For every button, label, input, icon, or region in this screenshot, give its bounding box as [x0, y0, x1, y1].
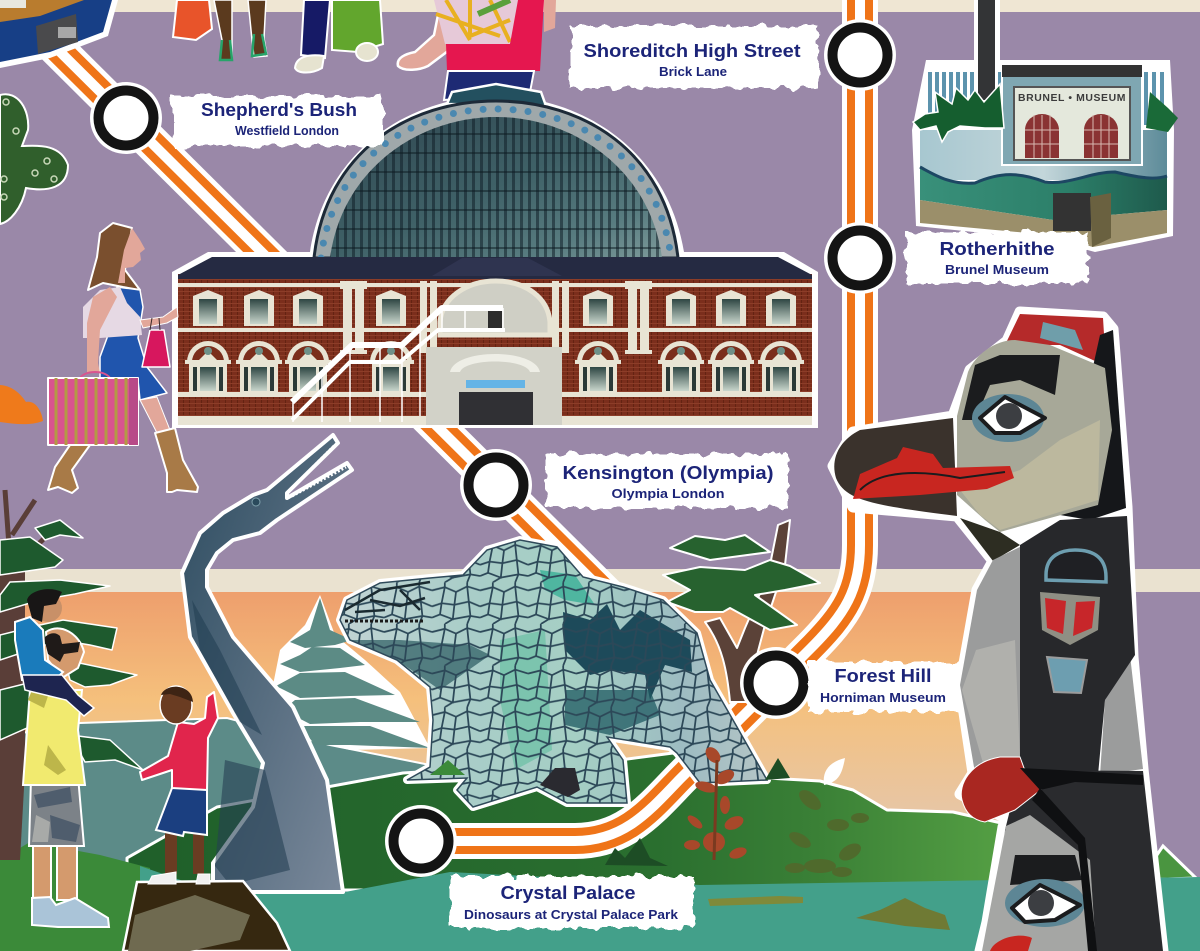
lower black diagonal [1032, 788, 1097, 951]
head side black [1060, 330, 1126, 520]
legs [33, 842, 77, 900]
label: Crystal Palace: Crystal Palace [500, 883, 636, 903]
label: Rotherhithe [906, 232, 1088, 284]
label: Rotherhithe: Brunel Museum [945, 263, 1049, 277]
white staircase [292, 308, 505, 422]
hair [88, 223, 140, 290]
man head [44, 628, 84, 678]
cornice and courses [178, 283, 812, 425]
face [118, 228, 145, 283]
foliage boughs [0, 520, 143, 770]
arm [398, 0, 462, 70]
bare branches [5, 490, 60, 560]
red shirt and arms [140, 692, 218, 790]
hat [1005, 314, 1106, 366]
dark door on upper landing [488, 311, 502, 328]
boughs [276, 598, 430, 748]
label: Kensington (Olympia) [546, 454, 788, 508]
blue trapezoid glyph [1047, 657, 1087, 693]
chimney [974, 0, 1000, 70]
grey right wing [1100, 655, 1143, 775]
illustration: rock [123, 881, 290, 951]
legs with sandals [214, 0, 267, 60]
teal shoulder patch [540, 570, 595, 605]
shorts [156, 788, 207, 836]
illustration: left pine tree [0, 490, 143, 860]
illustration: plesiosaur [182, 435, 352, 892]
illustration: mosaic dinosaur [340, 540, 767, 807]
pink top [446, 0, 544, 71]
patterned shirt [434, 0, 520, 44]
lower pole black [1000, 770, 1163, 951]
pale top [83, 287, 142, 338]
label: Shepherd's Bush: Shepherd's Bush [201, 100, 357, 120]
lower arched windows [185, 341, 804, 393]
label: Forest Hill: Horniman Museum [820, 691, 946, 705]
horizon cream band [0, 569, 1200, 592]
brick facade [178, 274, 812, 418]
illustration: pale pine tree [272, 595, 430, 750]
belly shadow [565, 690, 660, 735]
foliage [663, 535, 820, 630]
museum sign: BRUNEL • MUSEUM [1018, 92, 1126, 104]
label: Shoreditch High Street: Brick Lane [659, 65, 727, 79]
tube line: Shepherd's Bush to Kensington [30, 22, 610, 598]
upper windows [193, 290, 796, 326]
boy head [27, 589, 62, 622]
green bag [332, 0, 383, 52]
top cream band [0, 0, 1200, 12]
illustration: cactus [0, 94, 68, 224]
drum wall [920, 130, 1167, 180]
mosaic crack lines [340, 540, 767, 807]
illustration: shoppers legs and bags [173, 0, 383, 72]
blue oval glyph [1046, 550, 1106, 582]
dome glass [330, 117, 662, 258]
legs [165, 832, 204, 874]
trunk [0, 572, 25, 860]
landscape: hills and water [0, 718, 1200, 951]
railings [930, 72, 1162, 125]
station: Forest Hill [740, 647, 812, 719]
illustration: shopper woman [48, 223, 198, 493]
station: Rotherhithe [824, 222, 896, 294]
stone base [920, 200, 1167, 247]
illustration: orange flower [0, 385, 43, 424]
label: Forest Hill: Forest Hill [834, 666, 932, 686]
illustration: cedar tree [663, 520, 820, 702]
door [1053, 193, 1111, 247]
illustration: red-brown bush [684, 744, 748, 861]
magenta hand bag [142, 318, 170, 367]
tube line: Crystal Palace to Shoreditch [421, 0, 860, 841]
teal chest patch [500, 630, 552, 770]
grass tufts [430, 758, 790, 866]
illustration: olive bush [785, 786, 869, 877]
black band [1020, 768, 1143, 790]
label: Kensington (Olympia): Kensington (Olympia) [562, 463, 774, 483]
station: Crystal Palace [385, 805, 457, 877]
white backing [272, 595, 430, 750]
left meadow [0, 842, 150, 951]
head [957, 340, 1112, 532]
roof [178, 257, 812, 279]
camouflage shorts [29, 776, 84, 846]
dome outer rim [314, 101, 678, 258]
illustration: Olympia building [172, 84, 818, 428]
water reeds [856, 898, 950, 930]
head dark lines [345, 582, 430, 612]
illustration: boy in red [140, 686, 218, 884]
striped shopping bag [48, 372, 138, 445]
dark foot shadow [540, 768, 580, 797]
beak [834, 418, 957, 516]
label: Crystal Palace: Dinosaurs at Crystal Palace Park [464, 908, 678, 922]
dino body [340, 540, 767, 807]
illustration: person in pink top [398, 0, 556, 100]
label: Forest Hill [808, 662, 960, 712]
boy hoodie [15, 617, 63, 680]
jaw shadow [350, 640, 490, 690]
forearm [140, 307, 178, 328]
dino outline [340, 540, 767, 807]
trunk [705, 520, 790, 702]
sneakers [148, 872, 210, 884]
blue dress and skirt [100, 287, 167, 400]
label: Shoreditch High Street [570, 26, 818, 88]
eye [972, 394, 1045, 442]
station: Shoreditch High Street [824, 19, 896, 91]
wave line [920, 167, 1167, 183]
station: Shepherd's Bush [90, 82, 162, 154]
label: Crystal Palace [451, 876, 693, 928]
label: Shepherd's Bush: Westfield London [235, 124, 339, 138]
white silhouette [833, 312, 1163, 951]
teeth [345, 620, 425, 622]
red hand [961, 757, 1047, 822]
water [140, 866, 1200, 951]
arm [87, 287, 117, 373]
green wave band [920, 167, 1167, 220]
station: Kensington (Olympia) [460, 449, 532, 521]
museum sign [1014, 87, 1130, 160]
green hill [127, 753, 1010, 890]
illustration: Brunel Museum [912, 0, 1178, 252]
navy trousers and shoe [295, 0, 330, 72]
green plant [913, 84, 1004, 142]
label: Kensington (Olympia): Olympia London [612, 487, 724, 501]
pillars [340, 281, 652, 354]
label: Shepherd's Bush [172, 96, 383, 146]
central arch [440, 281, 550, 335]
head [160, 686, 193, 724]
dark back patch [563, 604, 692, 700]
illustration: train front [0, 0, 118, 68]
head black brow [962, 355, 1060, 420]
label: Rotherhithe: Rotherhithe [940, 239, 1054, 259]
water reed streak [708, 896, 803, 906]
orange bag [173, 0, 212, 40]
shoes [32, 897, 109, 927]
lower head [982, 815, 1096, 951]
yellow shirt [23, 690, 85, 785]
dome cap [447, 84, 546, 106]
illustration: father and son [15, 589, 109, 927]
dome dots [321, 109, 671, 258]
grey wing [960, 545, 1024, 773]
legs and boots [48, 397, 198, 493]
sunset sky [0, 592, 1135, 832]
label: Shoreditch High Street: Shoreditch High Street [584, 41, 800, 61]
grey teal far hill [10, 718, 430, 875]
illustration: totem pole [833, 312, 1163, 951]
red squares glyph [1040, 592, 1100, 645]
leaf on hill [824, 758, 845, 785]
outline silhouette [912, 60, 1174, 252]
navy shorts [444, 71, 534, 100]
black body [1020, 516, 1135, 775]
building [1002, 65, 1142, 165]
building outline [172, 96, 818, 428]
neck shadow [960, 518, 1020, 561]
boy legs [22, 675, 94, 716]
entrance block [426, 347, 562, 425]
red beak mouth [853, 447, 1014, 499]
